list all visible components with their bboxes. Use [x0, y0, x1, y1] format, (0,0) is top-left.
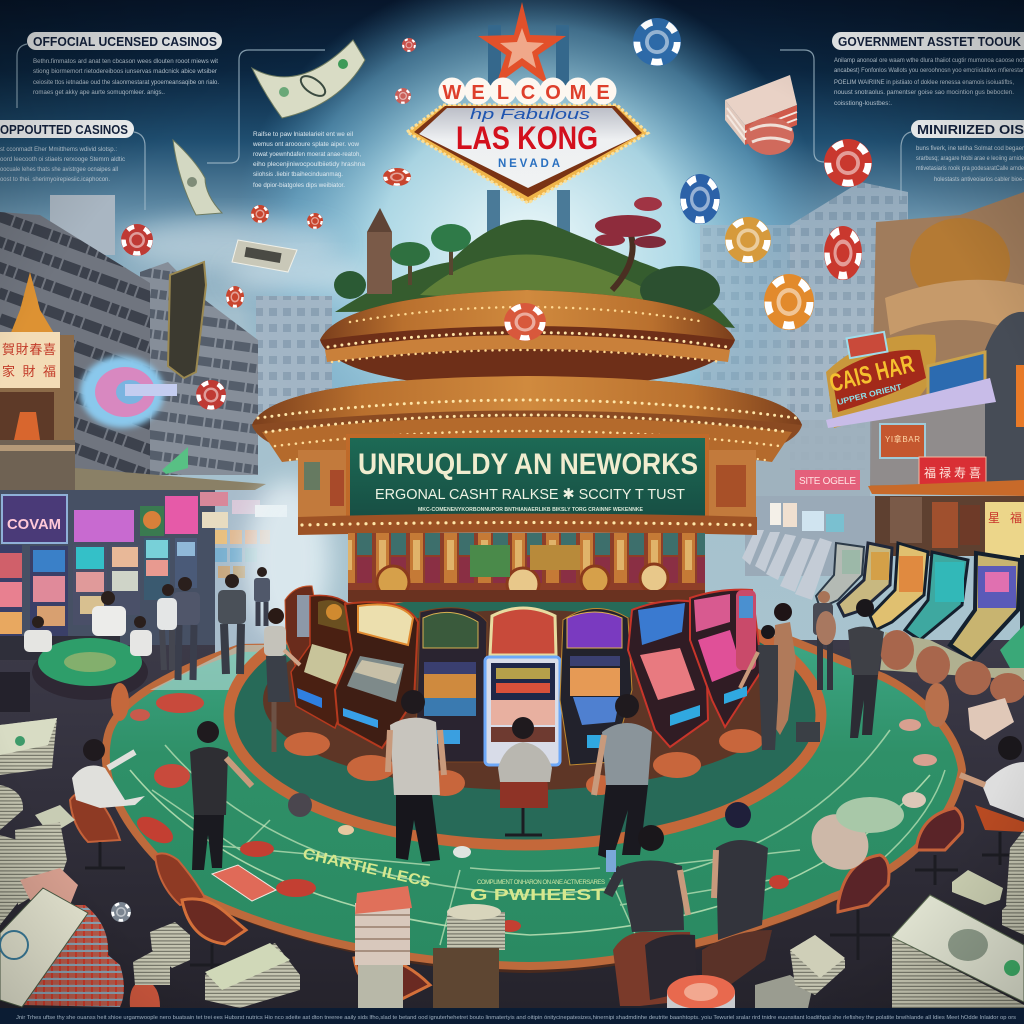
body text: ceiosite ttos ietnadae oud the slaonmestarat ypoemeansaqibe on rialo.	[33, 79, 219, 86]
seated man centre	[498, 717, 552, 782]
right arcade row	[742, 496, 1024, 703]
body text: coisstiong-loustbes:.	[834, 100, 892, 107]
icon: star on sign	[478, 2, 566, 85]
seated man white shirt left	[72, 739, 145, 808]
body text: romaes get akky ape aurte somuqomleer. anigs..	[33, 89, 165, 96]
script line: hp Fabulous	[470, 106, 591, 123]
slot machines row	[285, 586, 762, 765]
table lettering left: CHARTIE ILEC5	[301, 845, 432, 891]
money pile right edge	[1006, 830, 1024, 920]
woman grey top left of slots	[264, 608, 300, 752]
red chip stack	[20, 905, 160, 1007]
banner title: UNRUQLDY AN NEWORKS	[358, 448, 698, 481]
text block middle left: rowat yoewnhdafen moerat anae-reatoh,	[253, 151, 361, 158]
sign posts	[487, 25, 570, 280]
neon sign cais har	[826, 332, 996, 428]
city buildings right	[700, 182, 1024, 500]
body text	[33, 58, 219, 96]
gold pagoda lights	[8, 272, 58, 340]
city buildings left	[0, 195, 332, 492]
body text: oocuale lehes thats she avistrgee ocnaipes all	[0, 166, 118, 173]
flying banknote small	[232, 240, 297, 272]
man white tee centre	[388, 690, 444, 862]
red chip box stack	[355, 886, 412, 1008]
cash stacks bottom left	[133, 922, 300, 1008]
red bonsai tree	[595, 197, 666, 290]
large drum tier	[252, 376, 802, 518]
body text: st cconmadt Eher Mmitthems wdivid slotsp.:	[0, 146, 117, 153]
text block middle left: siiohsis .Iiebir tbaihecinduanmag.	[253, 171, 343, 178]
slot machine B	[291, 595, 356, 728]
red sign: 福禄寿喜	[924, 465, 981, 480]
cash bundle centre	[447, 904, 505, 950]
haze beside drum	[246, 480, 330, 640]
cream chinese sign: 賀財春喜	[2, 342, 56, 357]
dark hanging banner	[168, 262, 206, 378]
man dark shirt left table	[190, 721, 252, 870]
left side table	[0, 638, 148, 712]
covam screen	[2, 495, 67, 543]
callout: oppouted casinos: OPPOUTTED CASINOS	[0, 123, 128, 137]
dealer	[92, 591, 126, 636]
text block middle left	[252, 131, 366, 189]
welcome sign	[407, 78, 648, 203]
back wall cards: 星福	[988, 510, 1022, 525]
man dark tee bottom right	[714, 802, 768, 940]
body text	[916, 145, 1024, 183]
neon sign cais har: UPPER ORIENT	[836, 382, 903, 407]
upper drum tier	[320, 290, 735, 390]
text block middle left: foe dpior-biatgoles dips weibiator.	[253, 182, 345, 189]
slot machine E centre	[485, 608, 560, 765]
neon globe sign	[80, 356, 177, 428]
large banknote bottom left	[0, 888, 88, 1007]
seated left player	[24, 616, 52, 652]
salmon chip stack	[20, 868, 78, 905]
palm trees	[334, 224, 471, 299]
cash on right table	[952, 870, 1003, 905]
callout: oppouted casinos	[0, 120, 134, 183]
person far right	[813, 591, 836, 690]
large chip bottom centre	[667, 975, 735, 1009]
callout: official licensed casinos	[27, 32, 222, 96]
decorative frieze behind slots	[348, 533, 705, 602]
chairs with orange rims	[70, 683, 1024, 1006]
callout: minimized odds: MINIRIIZED OIS	[917, 123, 1024, 137]
slot machine F	[560, 608, 632, 765]
seated man right edge	[960, 736, 1024, 818]
body text	[0, 146, 125, 183]
body text: oost to thei. sherimyoirepiesiic.icaphocon.	[0, 176, 110, 183]
person white shirt left	[157, 584, 177, 670]
orange sign: YI拿BAR	[885, 434, 920, 444]
banner fine print: MKC-COMENENYKORBONNUPOR BNTHIANAERLIKB BIKSLY TORG CRAINNF WEKENNKE	[418, 507, 644, 513]
back wall cards	[770, 497, 1024, 560]
nevada: NEVADA	[498, 158, 560, 170]
band of lights under banner	[298, 514, 757, 535]
person back left group	[218, 574, 246, 674]
cash table	[880, 632, 1024, 680]
floating casino chips	[121, 18, 872, 410]
money stack upper left	[0, 718, 57, 775]
callout: official licensed casinos: OFFOCIAL UCENSED CASINOS	[33, 35, 217, 49]
red chip box stack floating	[725, 75, 797, 155]
slot machine G	[628, 601, 708, 747]
pink sign	[795, 470, 860, 490]
person back left 2	[173, 577, 200, 680]
cream chinese sign: 家財福	[2, 364, 56, 379]
person far back	[254, 567, 270, 626]
background sky	[0, 0, 1024, 700]
table lettering centre: G PWHEEST	[470, 887, 605, 904]
callout: minimized odds	[911, 120, 1024, 183]
body text	[834, 57, 1024, 107]
covam screen: COVAM	[7, 516, 61, 533]
orange sign	[880, 424, 925, 458]
left arcade row	[0, 490, 310, 660]
welcome bulbs: WELCOME	[443, 82, 610, 104]
footer strip: Jnir Trhes uftse thy she ouanss heit shioe urgamwoople nero buatsain tet trei ees Hubsrst nutrics Hio nco sdeite ast dton treeree aaily sids lfho,slad te betand ood ignuterhehetret bouto linmatertyis and oitipin ónitycinepatesizes,hinernipi shadmdinhe deutrite baanhtopts. yoiu Tewuriel sralar rird tnidre euunsitant loadithpal she rlefishey the polatite brwihlande all Idies Meet hOdde Inlaidor op ors	[16, 1015, 1016, 1021]
man grey tee right centre	[594, 694, 652, 860]
bar stools	[284, 729, 763, 796]
body text: nouust snotraolus. pamentser goise sao mocintion gus bebocten.	[834, 89, 1014, 96]
shopfront	[0, 272, 75, 490]
callout: government assist took: GOVERNMENT ASSTET TOOUK	[838, 35, 1021, 49]
callout: government assist took	[832, 32, 1024, 107]
man dark tee bottom centre	[606, 825, 688, 932]
hill with trees	[334, 197, 735, 328]
body text: stiong biormemort rietodereiboos iunservas madcnick abice wtsiber	[33, 68, 217, 75]
slot machine H	[690, 590, 762, 727]
man dark shirt standing right	[848, 599, 884, 738]
inner raised ring	[229, 585, 821, 845]
people standing and seated	[24, 567, 1024, 940]
slot machine D	[416, 608, 487, 762]
table small lettering: COMPLIMENT ONHARON ON ANE ACTIVERSARES	[477, 880, 605, 886]
wooden box	[433, 948, 499, 1008]
cash stack bottom right	[755, 935, 845, 1008]
neon sign cais har: CAIS HAR	[827, 350, 917, 398]
far pale machines	[742, 530, 832, 600]
body text: Bethn.fimmatos ard anat ten cbcason wees dlouten rooot miews wit	[33, 58, 218, 65]
haze left	[150, 645, 320, 690]
big money stack bottom right	[892, 895, 1024, 1008]
flying banknote left	[173, 140, 222, 215]
green banner panel	[346, 434, 709, 520]
man at slot right	[740, 625, 778, 750]
money stack left column	[0, 785, 75, 925]
main green casino table	[106, 585, 962, 973]
red sign	[919, 457, 986, 487]
text block middle left: wemus ont aroooure splate aiper. vow	[252, 141, 360, 148]
floor	[0, 640, 1024, 1008]
text block middle left: Raifse to paw lniatelarieit ent we eil	[253, 131, 353, 138]
body text: POELIM WAIRIINE in pistiiato of doklee renessa enamois isoiuatifbs,	[834, 79, 1014, 86]
banner subtitle: ERGONAL CASHT RALKSE ✱ SCCITY T TUST	[375, 486, 685, 503]
money stacks	[0, 698, 1024, 1009]
second dealer	[130, 616, 152, 656]
chip piles on the table	[130, 693, 937, 932]
near machines	[816, 543, 1024, 668]
woman right	[770, 603, 796, 735]
pink sign: SITE OGELE	[799, 476, 856, 487]
body text: oord leecooth oi stiaels rerxooge Stemrn aldtic	[0, 156, 125, 163]
las kong: LAS KONG	[456, 120, 598, 156]
cream chinese sign	[0, 332, 60, 388]
slot machine C	[335, 602, 418, 748]
row of chairs	[880, 630, 1024, 703]
text block middle left: eiho plecenjiniwocpoulbiietidy hrashna	[253, 161, 366, 168]
footer strip	[0, 1008, 1024, 1024]
connector lines	[17, 44, 911, 210]
small tower	[367, 208, 392, 294]
white chip	[111, 902, 131, 922]
slot machine far left	[285, 586, 322, 665]
flying banknote upper	[252, 40, 365, 118]
